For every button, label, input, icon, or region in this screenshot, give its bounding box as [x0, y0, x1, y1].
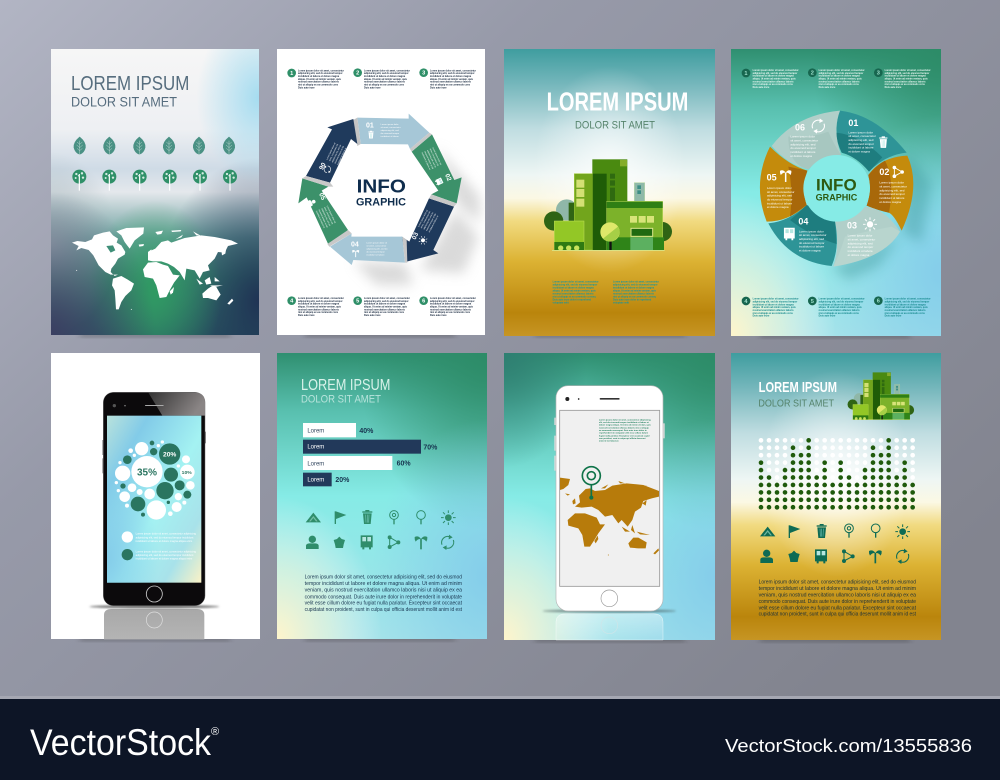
legend: adipisicing elit, sed do eiusmod tempor incididunt [136, 553, 194, 557]
caption text: elit, sed do eiusmod tempor incididunt ut labore et [599, 421, 649, 424]
icon grid [306, 510, 456, 550]
numbered footnotes top: adipisicing elit, sed do eiusmod tempor [364, 72, 409, 75]
phone screen [107, 416, 201, 583]
numbered footnotes top: nisi ut aliquip ex ea commodo cons [364, 83, 405, 86]
bubble 10%: 10% [182, 470, 192, 476]
numbered footnotes bottom: nostrud exercitation ullamco laboris [364, 308, 406, 311]
black phone [102, 392, 206, 606]
subheading: DOLOR SIT AMET [71, 94, 178, 109]
subheading: DOLOR SIT AMET [758, 399, 835, 410]
arrow 02: amet, consectetur elit [429, 148, 440, 167]
numbered footnotes bottom: Lorem ipsum dolor sit amet, consectetur [819, 298, 865, 301]
text columns: voluptate velit [613, 301, 629, 304]
numbered footnotes bottom: nisi ut aliquip ex ea commodo cons [753, 312, 793, 315]
arrow 01: incididunt ut labore [381, 135, 400, 138]
map pin [582, 467, 600, 500]
paragraph [305, 575, 463, 613]
centre title: GRAPHIC [356, 196, 406, 208]
paragraph: velit esse cillum dolore eu fugiat nulla pariatur. Excepteur sint occaecat [759, 605, 917, 611]
footer registered mark: ® [211, 726, 219, 738]
numbered footnotes top: Duis aute irure [364, 86, 381, 89]
segment 06: sit amet, consectetur [790, 138, 818, 142]
segment 03 [833, 207, 900, 267]
numbered footnotes top: 3 [422, 71, 425, 77]
segment 01: sit amet, consectetur [848, 134, 876, 138]
segment 04: sit amet, consectetur [799, 233, 827, 237]
heading: LOREM IPSUM [301, 377, 390, 394]
segment 03: do eiusmod tempor [848, 245, 873, 249]
arrow 05: 05 [317, 192, 327, 202]
text columns: incididunt ut labore et dolore magna [613, 286, 655, 289]
segment 05 [760, 147, 807, 222]
panel: donut infographic [731, 49, 941, 338]
numbered footnotes top: adipisicing elit, sed do eiusmod tempor [298, 72, 343, 75]
arrow 04: 04 [351, 242, 359, 249]
segment 02 [867, 156, 913, 231]
numbered footnotes bottom: nostrud exercitation ullamco laboris [819, 309, 860, 312]
text columns: nostrud exercitation ullamco laboris [553, 292, 594, 295]
numbered footnotes top: nostrud exercitation ullamco laboris [753, 80, 794, 83]
segment 03: Lorem ipsum dolor [848, 234, 872, 238]
numbered footnotes bottom: 5 [356, 299, 359, 305]
city illustration [848, 372, 914, 420]
segment 03: et dolore magna [848, 253, 870, 257]
donut centre: GRAPHIC [816, 193, 858, 203]
numbered footnotes bottom: 4 [290, 299, 294, 305]
numbered footnotes top: nostrud exercitation ullamco laboris [819, 80, 860, 83]
numbered footnotes bottom: incididunt ut labore et dolore magna [298, 303, 340, 306]
numbered footnotes top: incididunt ut labore et dolore magna [819, 75, 860, 78]
arrow 06: incididunt ut labore et [336, 147, 347, 166]
subheading: DOLOR SIT AMET [575, 120, 655, 132]
numbered footnotes bottom: incididunt ut labore et dolore magna [364, 303, 406, 306]
arrow 06: adipisicing elit, sed do [331, 143, 343, 163]
numbered footnotes bottom: incididunt ut labore et dolore magna [753, 303, 794, 306]
segment 04: adipisicing elit, sed [799, 237, 824, 241]
arrow 03: Lorem ipsum dolor sit [417, 209, 429, 227]
numbered footnotes top: aliqua. Ut enim ad minim veniam, quis [753, 77, 796, 80]
paragraph: Lorem ipsum dolor sit amet, consectetur adipisicing elit, sed do eiusmod [759, 579, 916, 585]
phone reflection [556, 614, 663, 640]
arrow 01: adipisicing elit, sed [381, 129, 400, 132]
dot matrix chart [761, 440, 913, 508]
numbered footnotes bottom: nostrud exercitation ullamco laboris [430, 308, 472, 311]
segment 06: incididunt ut labore [790, 150, 816, 154]
numbered footnotes top: Lorem ipsum dolor sit amet, consectetur [753, 69, 799, 72]
arrow 04: incididunt ut labore [366, 254, 385, 257]
numbered footnotes top: nisi ut aliquip ex ea commodo cons [885, 83, 925, 86]
numbered footnotes top: adipisicing elit, sed do eiusmod tempor [885, 72, 929, 75]
arrow 05: incididunt ut labore et [315, 210, 326, 229]
caption text: anim id est laborum [599, 440, 619, 443]
numbered footnotes bottom: nostrud exercitation ullamco laboris [885, 309, 926, 312]
segment 06: 06 [795, 123, 805, 133]
arrow 02: incididunt ut labore et [421, 152, 431, 171]
paragraph: Lorem ipsum dolor sit amet, consectetur adipisicing elit, sed do eiusmod [305, 575, 462, 581]
text columns: adipisicing elit, sed do eiusmod tempor [613, 283, 658, 286]
arrow 02: 02 [443, 173, 453, 183]
segment 04: Lorem ipsum dolor [799, 229, 824, 233]
text columns [553, 280, 659, 304]
arrow 03: adipisicing elit, sed do [423, 211, 435, 230]
arrow 05 [298, 178, 352, 247]
numbered footnotes top: aliqua. Ut enim ad minim veniam, quis [364, 78, 408, 81]
caption text: reprehenderit in voluptate velit esse cillum dolore [599, 432, 649, 435]
arrow 05: adipisicing elit, sed do [320, 208, 332, 227]
numbered footnotes top: incididunt ut labore et dolore magna [298, 75, 340, 78]
segment 05: sit amet, consectetur [767, 190, 795, 194]
phone screen [560, 410, 660, 586]
paragraph: tempor incididunt ut labore et dolore magna aliqua. Ut enim ad minim [305, 581, 462, 587]
caption text: ea commodo consequat. Duis aute irure dolor in [599, 429, 647, 432]
arrow 01: Lorem ipsum dolor [381, 123, 399, 126]
text columns: nostrud exercitation ullamco laboris [613, 292, 655, 295]
bar chart: Lorem [307, 461, 324, 467]
icon grid [760, 524, 910, 564]
bar chart: 20% [335, 477, 350, 484]
segment 06: et dolore magna [790, 154, 812, 158]
arrow 04: adipisicing elit, sed do [366, 248, 388, 251]
text columns: Lorem ipsum dolor sit amet, consectetur [553, 280, 599, 283]
arrow 03 [402, 194, 457, 262]
centre title: INFO [357, 176, 406, 197]
numbered footnotes bottom: nostrud exercitation ullamco laboris [753, 309, 794, 312]
arrow 06: 06 [317, 161, 326, 171]
text columns: Duis aute irure dolor in reprehend [613, 298, 652, 301]
tree icon row [72, 170, 237, 191]
phone shadow [543, 609, 676, 613]
numbered footnotes top: nisi ut aliquip ex ea commodo cons [819, 83, 859, 86]
numbered footnotes top: incididunt ut labore et dolore magna [364, 75, 406, 78]
legend [122, 531, 197, 561]
legend: adipisicing elit, sed do eiusmod tempor incididunt [136, 535, 194, 539]
paragraph: cupidatat non proident, sunt in culpa qui officia deserunt mollit anim id est [305, 607, 463, 613]
segment 04: incididunt ut labore [799, 245, 824, 249]
numbered footnotes bottom: aliqua. Ut enim ad minim veniam, quis [819, 306, 862, 309]
bubble chart [115, 440, 195, 520]
panel: world map cover [51, 49, 259, 337]
segment 03: sit amet, consectetur [848, 237, 875, 241]
panel: white phone with map [504, 353, 715, 642]
paragraph: veniam, quis nostrud exercitation ullamco laboris nisi ut aliquip ex ea [759, 592, 916, 598]
footer image id: VectorStock.com/13555836 [725, 736, 972, 756]
segment 02: 02 [879, 167, 889, 177]
text columns: incididunt ut labore et dolore magna [553, 286, 594, 289]
footer bar [0, 696, 1000, 780]
segment 04: 04 [798, 216, 808, 226]
legend: incididunt ut labore et dolore magna aliqua enim [136, 557, 193, 561]
numbered footnotes bottom: nisi ut aliquip ex ea commodo cons [819, 312, 859, 315]
text columns: adipisicing elit, sed do eiusmod tempor [553, 283, 597, 286]
arrow 01: 01 [366, 122, 374, 129]
numbered footnotes bottom: Lorem ipsum dolor sit amet, consectetur [364, 297, 410, 300]
bubble 35%: 35% [137, 467, 157, 478]
numbered footnotes top: 1 [744, 71, 748, 77]
paragraph [759, 579, 917, 618]
text columns: voluptate velit [553, 301, 569, 304]
numbered footnotes bottom: Lorem ipsum dolor sit amet, consectetur [298, 297, 344, 300]
arrow 06 [302, 119, 357, 187]
centre title [356, 176, 406, 208]
segment 02: do eiusmod tempor [879, 192, 905, 196]
arrow 01: sit amet, consectetur [381, 126, 401, 129]
numbered footnotes bottom [287, 296, 476, 317]
donut centre [803, 155, 870, 222]
numbered footnotes bottom: Duis aute irure [430, 314, 447, 317]
numbered footnotes bottom: 6 [422, 299, 425, 305]
brown world map [560, 478, 659, 555]
numbered footnotes bottom: adipisicing elit, sed do eiusmod tempor [364, 300, 409, 303]
paragraph: veniam, quis nostrud exercitation ullamco laboris nisi ut aliquip ex ea [305, 588, 462, 594]
panel: hexagon arrows infographic [277, 49, 485, 337]
numbered footnotes bottom: aliqua. Ut enim ad minim veniam, quis [753, 306, 796, 309]
numbered footnotes top: nostrud exercitation ullamco laboris [364, 81, 406, 84]
numbered footnotes top: aliqua. Ut enim ad minim veniam, quis [885, 77, 928, 80]
bar chart: 60% [397, 461, 411, 468]
arrow 03: amet, consectetur elit [420, 210, 432, 229]
numbered footnotes bottom: Duis aute irure [298, 314, 315, 317]
numbered footnotes top: aliqua. Ut enim ad minim veniam, quis [298, 78, 342, 81]
numbered footnotes bottom: nisi ut aliquip ex ea commodo cons [298, 311, 339, 314]
numbered footnotes bottom: Duis aute irure [819, 315, 836, 318]
white world map [72, 227, 238, 310]
segment 04: do eiusmod tempor [799, 241, 825, 245]
segment 01: Lorem ipsum dolor [848, 130, 873, 134]
text columns: nisi ut aliquip ex ea commodo conseq [553, 295, 596, 298]
numbered footnotes bottom: 5 [811, 299, 814, 305]
bar chart: 70% [423, 444, 438, 451]
numbered footnotes bottom: aliqua. Ut enim ad minim veniam, quis [298, 305, 342, 308]
segment 03: 03 [847, 221, 857, 231]
numbered footnotes top [742, 68, 931, 89]
paragraph: commodo consequat. Duis aute irure dolor in reprehenderit in voluptate [305, 594, 462, 600]
numbered footnotes top: Duis aute irure [885, 86, 902, 89]
bar chart: Lorem [307, 428, 324, 434]
segment 05: et dolore magna [767, 205, 789, 209]
bar chart: Lorem [307, 445, 324, 451]
arrow long shadows [353, 147, 480, 285]
phone reflection [104, 609, 204, 639]
arrow 06: amet, consectetur elit [328, 143, 339, 162]
segment 02: adipisicing elit, sed [879, 188, 905, 192]
segment 06: adipisicing elit, sed [790, 142, 816, 146]
text columns: aliqua. Ut enim ad minim veniam, quis [553, 289, 596, 292]
numbered footnotes top: nisi ut aliquip ex ea commodo cons [430, 83, 471, 86]
segment 06: Lorem ipsum dolor [790, 135, 815, 139]
numbered footnotes bottom: Lorem ipsum dolor sit amet, consectetur [885, 298, 931, 301]
segment 01: et dolore magna [848, 149, 870, 153]
numbered footnotes top: nisi ut aliquip ex ea commodo cons [298, 83, 339, 86]
numbered footnotes bottom: incididunt ut labore et dolore magna [819, 303, 860, 306]
numbered footnotes bottom: adipisicing elit, sed do eiusmod tempor [430, 300, 475, 303]
panel: black phone on white [51, 353, 260, 641]
numbered footnotes bottom: aliqua. Ut enim ad minim veniam, quis [885, 306, 928, 309]
segment 04 [768, 205, 837, 266]
numbered footnotes top: nostrud exercitation ullamco laboris [885, 80, 926, 83]
arrow 02: adipisicing elit, sed do [426, 149, 437, 169]
segment 01: do eiusmod tempor [848, 142, 874, 146]
legend: incididunt ut labore et dolore magna aliqua enim [136, 539, 193, 543]
numbered footnotes top: 3 [877, 71, 880, 77]
numbered footnotes top: aliqua. Ut enim ad minim veniam, quis [430, 78, 474, 81]
segment 06: do eiusmod tempor [790, 146, 816, 150]
numbered footnotes top: adipisicing elit, sed do eiusmod tempor [819, 72, 863, 75]
numbered footnotes top: 2 [356, 71, 359, 77]
numbered footnotes bottom: nostrud exercitation ullamco laboris [298, 308, 340, 311]
segment 05: adipisicing elit, sed [767, 194, 792, 198]
donut shadow [832, 153, 932, 280]
heading: LOREM IPSUM [759, 379, 837, 396]
numbered footnotes top: aliqua. Ut enim ad minim veniam, quis [819, 77, 862, 80]
numbered footnotes bottom: adipisicing elit, sed do eiusmod tempor [753, 300, 797, 303]
numbered footnotes bottom: nisi ut aliquip ex ea commodo cons [364, 311, 405, 314]
numbered footnotes top: Duis aute irure [430, 86, 447, 89]
numbered footnotes bottom: nisi ut aliquip ex ea commodo cons [430, 311, 471, 314]
arrow 02 [410, 133, 462, 203]
numbered footnotes bottom: adipisicing elit, sed do eiusmod tempor [819, 300, 863, 303]
numbered footnotes top: Duis aute irure [753, 86, 770, 89]
numbered footnotes top: adipisicing elit, sed do eiusmod tempor [430, 72, 475, 75]
numbered footnotes bottom [742, 296, 931, 318]
numbered footnotes top: 2 [811, 71, 814, 77]
caption text: nostrud exercitation ullamco laboris nisi ut aliquip [599, 426, 649, 429]
segment 01: adipisicing elit, sed [848, 138, 874, 142]
numbered footnotes top: Lorem ipsum dolor sit amet, consectetur [430, 69, 476, 72]
arrow 04: do eiusmod tempor [366, 251, 385, 254]
arrow 03: eiusmod tempor ut lab [425, 212, 437, 232]
numbered footnotes bottom: adipisicing elit, sed do eiusmod tempor [885, 300, 929, 303]
arrow 05: amet, consectetur elit [323, 206, 334, 225]
paragraph: tempor incididunt ut labore et dolore magna aliqua. Ut enim ad minim [759, 586, 916, 592]
caption text: non proident, sunt in culpa qui officia deserunt [599, 437, 646, 440]
segment 05: do eiusmod tempor [767, 197, 793, 201]
heading: LOREM IPSUM [71, 73, 189, 95]
segment 02: et dolore magna [879, 200, 901, 204]
segment 01 [836, 111, 907, 172]
heading: LOREM IPSUM [547, 87, 688, 117]
caption text: Lorem ipsum dolor sit amet, consectetur adipisicing [599, 418, 651, 421]
numbered footnotes top: adipisicing elit, sed do eiusmod tempor [753, 72, 797, 75]
segment 03: adipisicing elit, sed [848, 241, 873, 245]
numbered footnotes bottom: nisi ut aliquip ex ea commodo cons [885, 312, 925, 315]
segment 01: incididunt ut labore [848, 146, 874, 150]
segment 01: 01 [848, 118, 858, 128]
leaf icon row [74, 137, 235, 157]
numbered footnotes top: nisi ut aliquip ex ea commodo cons [753, 83, 793, 86]
paragraph: cupidatat non proident, sunt in culpa qui officia deserunt mollit anim id est [759, 612, 917, 618]
footer logo: VectorStock [30, 721, 211, 763]
arrow 06: eiusmod tempor ut lab [334, 145, 345, 164]
numbered footnotes top: nostrud exercitation ullamco laboris [298, 81, 340, 84]
text columns: Duis aute irure dolor in reprehend [553, 298, 591, 301]
arrow 02: eiusmod tempor ut lab [423, 151, 435, 170]
arrow 05: Lorem ipsum dolor sit [326, 205, 337, 224]
numbered footnotes top: incididunt ut labore et dolore magna [430, 75, 472, 78]
numbered footnotes bottom: incididunt ut labore et dolore magna [430, 303, 472, 306]
arrow 05: eiusmod tempor ut lab [318, 209, 329, 229]
text columns: Lorem ipsum dolor sit amet, consectetur [613, 280, 659, 283]
arrow 01: do eiusmod tempor [381, 132, 399, 135]
numbered footnotes bottom: Duis aute irure [364, 314, 381, 317]
bar chart: 40% [359, 428, 374, 435]
paragraph: velit esse cillum dolore eu fugiat nulla pariatur. Excepteur sint occaecat [305, 601, 463, 607]
numbered footnotes top: Lorem ipsum dolor sit amet, consectetur [819, 69, 865, 72]
subheading: DOLOR SIT AMET [301, 393, 381, 405]
panel: bars and icons [277, 353, 487, 641]
numbered footnotes top: incididunt ut labore et dolore magna [753, 75, 794, 78]
segment 05: incididunt ut labore [767, 201, 792, 205]
segment 02: Lorem ipsum dolor [879, 181, 904, 185]
numbered footnotes bottom: Duis aute irure [753, 315, 770, 318]
bar chart: Lorem [307, 478, 324, 484]
segment 03: incididunt ut labore [848, 249, 873, 253]
numbered footnotes bottom: adipisicing elit, sed do eiusmod tempor [298, 300, 343, 303]
arrow 04: sit amet, consectetur [366, 245, 387, 248]
arrow 03: incididunt ut labore et [428, 215, 440, 233]
caption text: fugiat nulla pariatur. Excepteur sint occaecat cupid [599, 434, 650, 437]
legend: Lorem ipsum dolor sit amet, consectetur adipisicing [136, 532, 197, 536]
city illustration [544, 159, 672, 251]
numbered footnotes top: 1 [290, 71, 293, 77]
segment 06 [772, 111, 841, 169]
numbered footnotes top [287, 68, 476, 89]
arrow 01 [353, 114, 429, 149]
numbered footnotes top: Duis aute irure [819, 86, 836, 89]
panel: city cover [504, 49, 715, 337]
bar chart [303, 423, 438, 486]
numbered footnotes top: Lorem ipsum dolor sit amet, consectetur [885, 69, 931, 72]
numbered footnotes bottom: aliqua. Ut enim ad minim veniam, quis [364, 305, 408, 308]
donut centre: INFO [816, 176, 857, 195]
numbered footnotes bottom: Lorem ipsum dolor sit amet, consectetur [430, 297, 476, 300]
segment 05: 05 [767, 172, 777, 182]
segment 02: incididunt ut labore [879, 196, 905, 200]
arrow 06: Lorem ipsum dolor sit [326, 142, 337, 160]
numbered footnotes bottom: Lorem ipsum dolor sit amet, consectetur [753, 298, 799, 301]
numbered footnotes top: incididunt ut labore et dolore magna [885, 75, 926, 78]
numbered footnotes top: Lorem ipsum dolor sit amet, consectetur [364, 69, 410, 72]
text columns: nisi ut aliquip ex ea commodo conseq [613, 295, 656, 298]
caption text: dolore magna aliqua. Ut enim ad minim veniam, quis [599, 424, 652, 427]
numbered footnotes bottom: aliqua. Ut enim ad minim veniam, quis [430, 305, 474, 308]
numbered footnotes bottom: 6 [877, 299, 880, 305]
text columns: aliqua. Ut enim ad minim veniam, quis [613, 289, 657, 292]
arrow 03: 03 [411, 231, 420, 241]
arrow 02: Lorem ipsum dolor sit [431, 147, 442, 166]
phone shadow [89, 605, 219, 608]
numbered footnotes bottom: Duis aute irure [885, 315, 902, 318]
numbered footnotes bottom: incididunt ut labore et dolore magna [885, 303, 926, 306]
white phone [554, 386, 665, 611]
paragraph: commodo consequat. Duis aute irure dolor in reprehenderit in voluptate [759, 599, 916, 605]
segment 02: sit amet, consectetur [879, 184, 907, 188]
numbered footnotes bottom: 4 [744, 299, 748, 305]
panel: dot chart and city [731, 353, 941, 642]
numbered footnotes top: Lorem ipsum dolor sit amet, consectetur [298, 69, 344, 72]
numbered footnotes top: nostrud exercitation ullamco laboris [430, 81, 472, 84]
arrow 04: Lorem ipsum dolor sit [366, 242, 387, 245]
numbered footnotes top: Duis aute irure [298, 86, 315, 89]
bubble 20%: 20% [163, 451, 176, 458]
arrow 04 [330, 233, 407, 265]
legend: Lorem ipsum dolor sit amet, consectetur adipisicing [136, 549, 197, 553]
segment 05: Lorem ipsum dolor [767, 186, 792, 190]
segment 04: et dolore magna [799, 248, 821, 252]
